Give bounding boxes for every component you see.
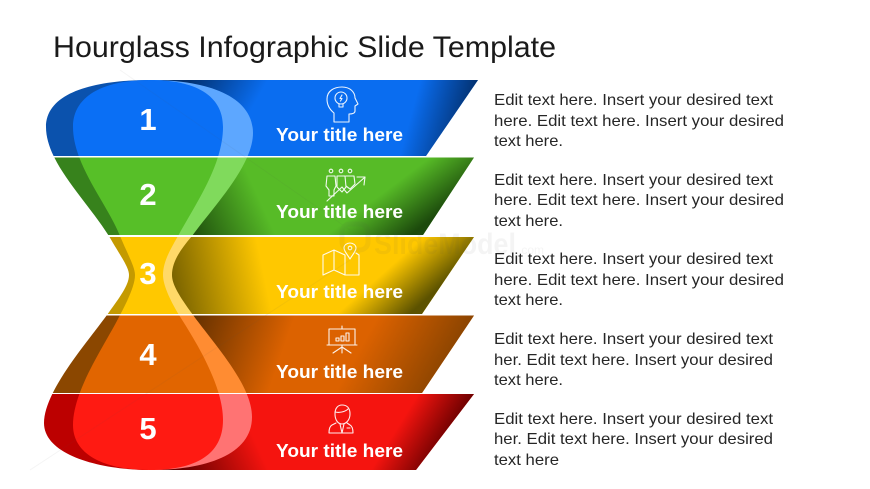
text block 2 xyxy=(494,172,784,230)
panel: tier 1 xyxy=(46,80,478,156)
band: yellow xyxy=(108,237,474,314)
number 3: 3 xyxy=(139,256,157,291)
icon: map with pin xyxy=(323,243,359,275)
watermark: .com xyxy=(518,243,544,257)
text block 3: here. Edit text here. Insert your desired xyxy=(494,272,784,289)
text block 3: Edit text here. Insert your desired text xyxy=(494,251,774,268)
icon: businessman xyxy=(329,405,353,433)
label: Your title here xyxy=(276,124,403,145)
text block 1 xyxy=(494,92,784,150)
icon: presentation board xyxy=(327,326,357,353)
number 5: 5 xyxy=(139,411,157,446)
band: red xyxy=(44,394,474,470)
number 2: 2 xyxy=(139,177,157,212)
band: blue xyxy=(46,80,478,156)
text block 5 xyxy=(494,411,774,469)
panel: tier 4 xyxy=(52,316,474,393)
text block 5: text here xyxy=(494,452,559,469)
text block 5: Edit text here. Insert your desired text xyxy=(494,411,774,428)
label: Your title here xyxy=(276,201,403,222)
number 1: 1 xyxy=(139,102,157,137)
text block 4: text here. xyxy=(494,372,563,389)
band: orange xyxy=(52,316,474,393)
text block 4: Edit text here. Insert your desired text xyxy=(494,331,774,348)
number 4: 4 xyxy=(139,337,157,372)
panel: tier 2 xyxy=(54,158,474,235)
title: Hourglass Infographic Slide Template xyxy=(53,31,556,64)
watermark xyxy=(30,70,544,470)
text block 1: here. Edit text here. Insert your desired xyxy=(494,113,784,130)
watermark: SlideModel xyxy=(374,228,516,261)
label: Your title here xyxy=(276,361,403,382)
text block 2: text here. xyxy=(494,213,563,230)
text block 4: her. Edit text here. Insert your desired xyxy=(494,352,773,369)
label: Your title here xyxy=(276,440,403,461)
icon: head with light bulb xyxy=(327,87,358,122)
text block 1: Edit text here. Insert your desired text xyxy=(494,92,774,109)
text block 5: her. Edit text here. Insert your desired xyxy=(494,431,773,448)
text block 2: here. Edit text here. Insert your desired xyxy=(494,192,784,209)
text block 3: text here. xyxy=(494,292,563,309)
icon: team with rising arrow xyxy=(326,169,365,201)
text block 2: Edit text here. Insert your desired text xyxy=(494,172,774,189)
text block 3 xyxy=(494,251,784,309)
panel: tier 3 xyxy=(108,237,474,314)
panel: tier 5 xyxy=(44,394,474,470)
text block 4 xyxy=(494,331,774,389)
band: green xyxy=(54,158,474,235)
label: Your title here xyxy=(276,281,403,302)
text block 1: text here. xyxy=(494,133,563,150)
